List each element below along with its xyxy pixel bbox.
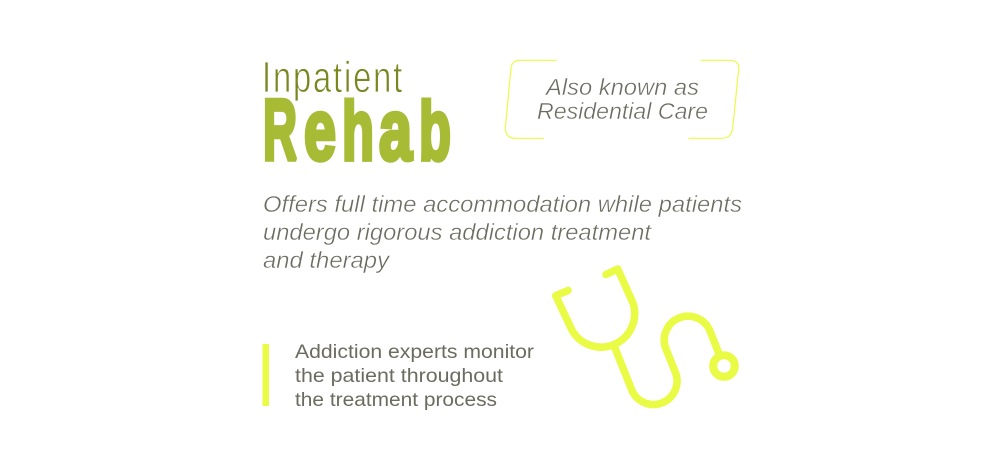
description text: and therapy	[263, 247, 391, 273]
callout: also known as	[505, 60, 739, 138]
ear tubes and U-shaped head	[556, 269, 635, 347]
accent bar	[262, 344, 269, 406]
title: Rehab: h	[342, 83, 374, 179]
title: Rehab: R	[263, 83, 297, 179]
description text: Offers full time accommodation while patients	[263, 191, 743, 217]
infographic canvas	[262, 60, 742, 410]
tube	[615, 316, 720, 405]
callout frame: left bracket	[505, 60, 557, 138]
callout frame: right bracket	[688, 60, 739, 138]
callout text: Also known as	[544, 74, 700, 100]
chest piece	[713, 355, 735, 377]
description text: undergo rigorous addiction treatment	[263, 219, 653, 245]
key point text: the treatment process	[295, 389, 497, 411]
title: Rehab	[264, 98, 450, 163]
title: Rehab: e	[304, 83, 336, 179]
key point text: Addiction experts monitor	[295, 341, 535, 363]
icon: stethoscope	[556, 269, 735, 405]
title: Rehab: b	[419, 83, 451, 179]
title: Inpatient: Inpatient	[262, 54, 403, 102]
callout text: Residential Care	[537, 98, 708, 124]
key point text: the patient throughout	[295, 365, 504, 387]
title: Rehab: a	[379, 83, 413, 179]
